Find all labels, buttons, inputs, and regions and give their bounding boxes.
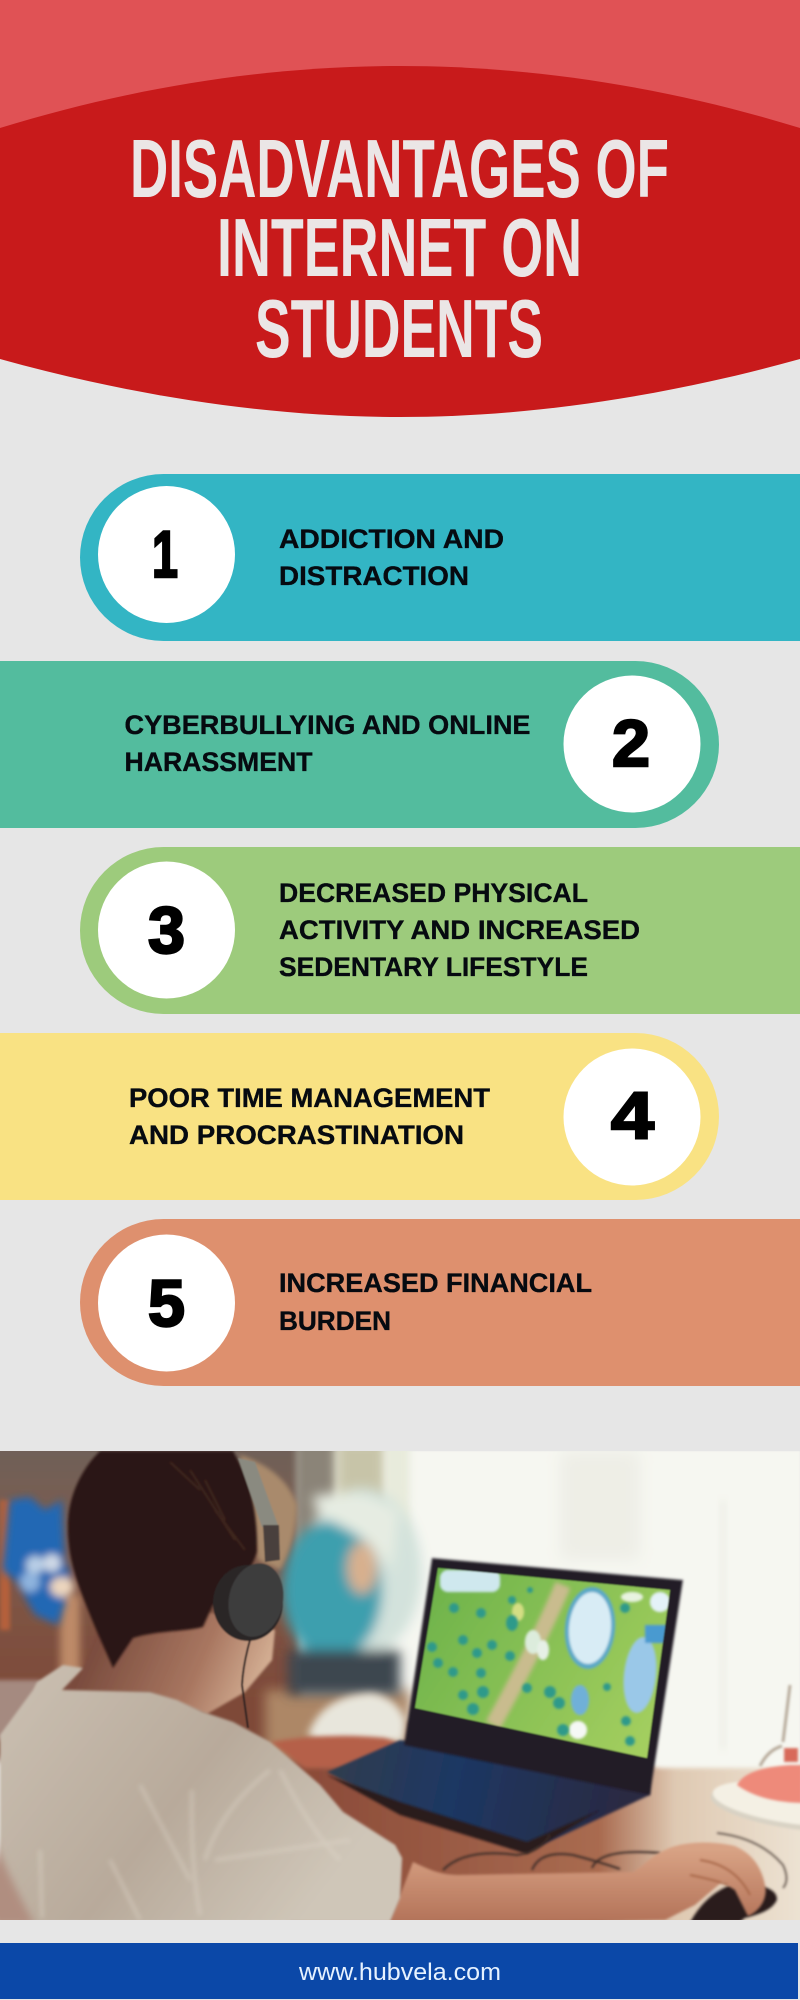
panel: item 3	[80, 847, 800, 1014]
cables on desk	[443, 1833, 786, 1888]
left hand	[270, 1736, 412, 1769]
t-shirt	[0, 1665, 402, 1925]
text: poor time management	[129, 1083, 491, 1150]
laptop base	[327, 1740, 650, 1854]
number badge 4: 4	[611, 1078, 654, 1152]
panel: item 2	[0, 661, 719, 828]
number badge 5	[98, 1234, 235, 1372]
globe	[282, 1488, 422, 1695]
right arm and hand on mouse	[390, 1843, 777, 1922]
text: cyberbullying: HARASSMENT	[124, 747, 313, 777]
title: STUDENTS	[255, 282, 543, 375]
blue bokeh lights	[2, 1497, 74, 1625]
lamp	[708, 1685, 800, 1841]
text: increased financial burden: INCREASED FINANCIAL	[279, 1268, 592, 1298]
panel: item 5	[80, 1219, 800, 1386]
neck	[60, 1610, 275, 1714]
website url: www.hubvela.com	[298, 1959, 501, 1986]
text: addiction and distraction	[279, 524, 504, 591]
text: addiction and distraction: ADDICTION AND	[279, 524, 504, 554]
laptop screen	[404, 1558, 683, 1795]
number badge 5: 5	[148, 1266, 185, 1340]
text: addiction and distraction: DISTRACTION	[279, 561, 469, 591]
text: decreased physical activity: SEDENTARY LIFESTYLE	[279, 952, 588, 982]
text: poor time management: POOR TIME MANAGEMENT	[129, 1083, 491, 1113]
footer bar	[0, 1943, 798, 1999]
number badge 1: 1	[152, 517, 178, 591]
blond hair edge	[240, 1455, 297, 1570]
hair	[68, 1451, 257, 1668]
desk	[290, 1720, 800, 1920]
number badge 2	[564, 676, 700, 812]
text: decreased physical activity	[279, 878, 640, 982]
white object on desk	[308, 1693, 406, 1745]
text: decreased physical activity: DECREASED PHYSICAL	[279, 878, 588, 908]
text: cyberbullying	[124, 710, 530, 777]
header banner	[0, 0, 800, 417]
number badge 2: 2	[612, 706, 650, 780]
number badge 4	[564, 1048, 700, 1186]
text: cyberbullying: CYBERBULLYING AND ONLINE	[124, 710, 530, 740]
text: increased financial burden	[279, 1268, 592, 1336]
panel: item 1	[80, 474, 800, 641]
number badge 1	[98, 486, 235, 623]
headphones	[213, 1458, 290, 1728]
illustration: boy with headphones using a laptop	[0, 1440, 800, 1930]
number badge 3	[98, 862, 235, 998]
text: poor time management: AND PROCRASTINATION	[129, 1120, 464, 1150]
number badge 3: 3	[148, 893, 185, 967]
text: decreased physical activity: ACTIVITY AND INCREASED	[279, 915, 640, 945]
panel: item 4	[0, 1033, 719, 1200]
text: increased financial burden: BURDEN	[279, 1306, 391, 1336]
title: INTERNET ON	[217, 201, 582, 294]
blurred room background	[0, 1451, 633, 1765]
title	[130, 122, 669, 375]
